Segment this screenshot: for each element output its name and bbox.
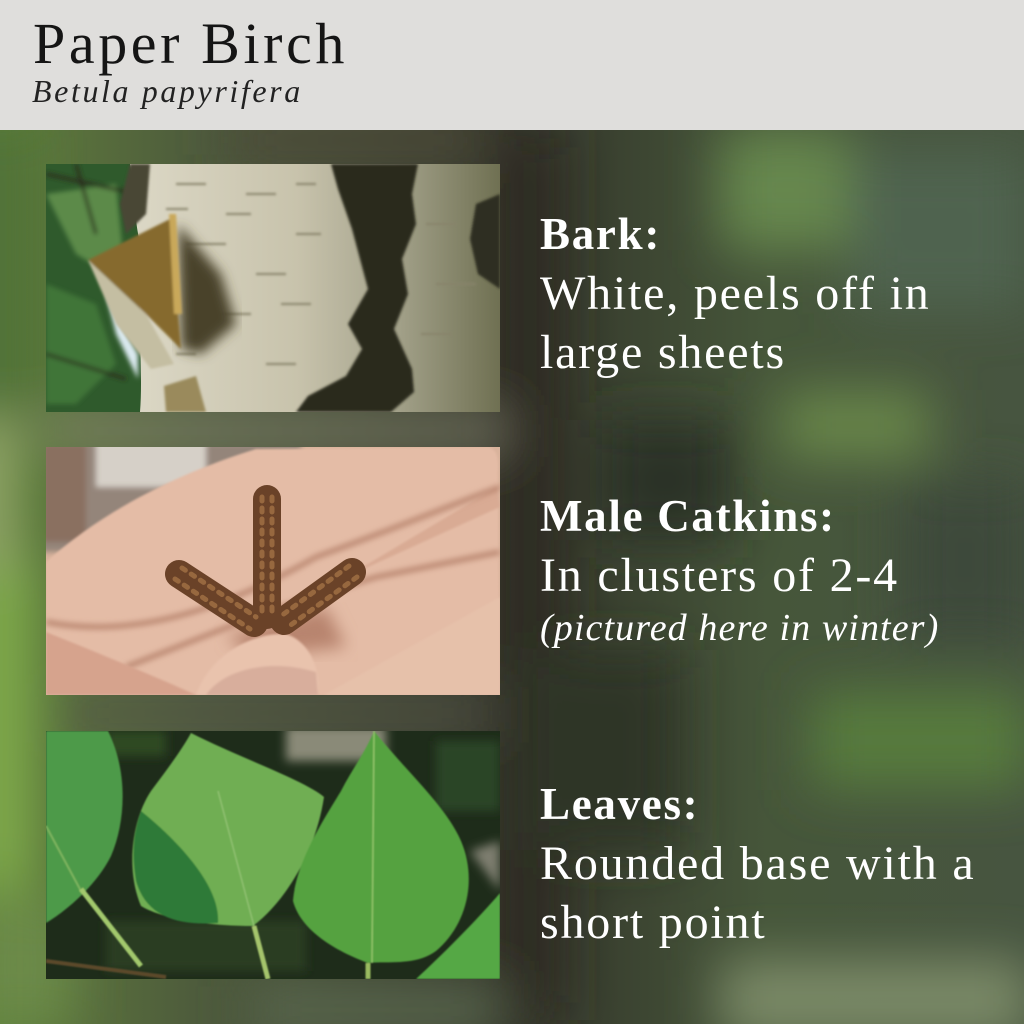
text: bark: White, peels off in	[540, 267, 931, 320]
text: leaves: Rounded base with a	[540, 837, 975, 890]
catkins	[179, 499, 352, 623]
text: leaves	[540, 779, 975, 949]
title: Paper Birch	[33, 11, 348, 76]
text: leaves: Leaves:	[540, 779, 699, 829]
text: male catkins	[540, 491, 939, 649]
text: bark: large sheets	[540, 326, 786, 379]
photo: bark	[46, 164, 500, 412]
scientific name: Betula papyrifera	[32, 73, 303, 109]
text: male catkins: In clusters of 2-4	[540, 549, 899, 602]
header band	[0, 0, 1024, 130]
text: male catkins: Male Catkins:	[540, 491, 836, 541]
text: bark: Bark:	[540, 209, 661, 259]
text: bark	[540, 209, 931, 379]
text: male catkins: (pictured here in winter)	[540, 607, 939, 649]
photo: leaves	[46, 731, 500, 979]
photo: male catkins	[46, 447, 500, 695]
text: leaves: short point	[540, 896, 766, 949]
